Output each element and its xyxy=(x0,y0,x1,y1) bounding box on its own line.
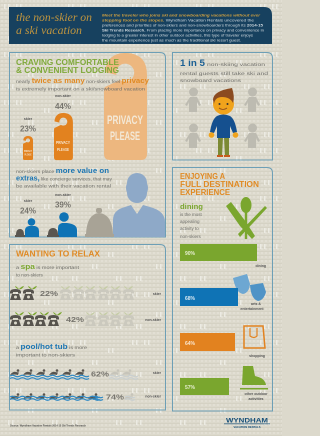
heading: & CONVENIENT LODGING xyxy=(16,66,119,75)
intro text: the mountain experience just as much as the traditional ski resort guest. xyxy=(102,37,241,42)
bar: outdoor 57%: other outdoor xyxy=(245,392,268,396)
extras text: be available with their vacation rental xyxy=(16,184,111,188)
bar: shopping 64%: shopping xyxy=(249,354,265,358)
bar: outdoor 57% xyxy=(180,378,268,401)
dining text: non-skiers xyxy=(180,234,202,239)
chart: pool non-skier 74%: non-skier xyxy=(145,394,162,398)
intro text xyxy=(102,12,264,42)
bar: outdoor 57%: activities xyxy=(249,397,264,401)
chart: extras non-skier 39%: non-skier xyxy=(55,193,72,197)
large bell icon xyxy=(85,208,114,237)
panel: destination experience xyxy=(172,168,272,411)
stat text: rental guests still take ski and xyxy=(180,71,268,77)
logo: Wyndham: WYNDHAM xyxy=(226,418,268,424)
intro text: preferences and priorities of non-skiers and non-snowboarders through its 2014-15 xyxy=(102,22,264,27)
bar: arts 68%: 68% xyxy=(185,296,196,302)
bar: dining 90% xyxy=(180,244,266,268)
chart: pool non-skier 74% xyxy=(10,392,162,402)
heading: ENJOYING A xyxy=(180,172,225,181)
stat text: 1 in 5 xyxy=(180,58,206,69)
chart: privacy non-skier 44%: non-skier xyxy=(55,94,72,98)
title: a ski vacation xyxy=(16,25,82,37)
heading xyxy=(180,172,259,197)
dining text: dining xyxy=(180,204,203,211)
heading: FULL DESTINATION xyxy=(180,180,259,189)
intro text: stepping foot on the slopes. Wyndham Vacation Rentals uncovered the xyxy=(102,17,255,22)
chart: extras non-skier 39% xyxy=(47,193,77,237)
chart: privacy non-skier 44%: PLEASE xyxy=(57,147,69,152)
intro text: Meet the traveler who joins ski and snowboarding vacations without ever xyxy=(102,12,260,17)
chart: extras skier 24% xyxy=(15,199,39,237)
chart: spa skier 22%: skier xyxy=(153,292,162,296)
chart: spa skier 22%: 22% xyxy=(40,289,58,298)
chart: privacy non-skier 44% xyxy=(54,94,73,160)
chart: extras skier 24%: skier xyxy=(24,199,33,203)
spa text: a spa is more important xyxy=(16,264,80,271)
chart: privacy skier 23%: 23% xyxy=(20,124,36,134)
spa text xyxy=(16,264,80,278)
heading: WANTING TO RELAX xyxy=(16,250,101,258)
chart: pool skier 62%: 62% xyxy=(91,370,109,378)
logo: Wyndham xyxy=(224,418,270,429)
intro text: Ski Trends Research. From placing more importance on privacy and convenience in xyxy=(102,27,264,32)
bar: shopping 64% xyxy=(180,333,265,358)
panel: wanting to relax xyxy=(10,244,166,410)
large door hanger: PLEASE xyxy=(110,129,140,143)
chart: privacy non-skier 44%: 44% xyxy=(55,102,71,111)
large door hanger: PRIVACY xyxy=(107,113,143,127)
chart: pool skier 62%: skier xyxy=(153,371,162,375)
chart: spa non-skier 42% xyxy=(10,312,162,326)
stat text: snowboard vacations xyxy=(180,78,242,84)
bar: dining 90%: 90% xyxy=(185,251,196,257)
pool text xyxy=(16,344,87,358)
panel: 1 in 5 xyxy=(172,52,272,160)
chart: privacy skier 23%: PRIVACY xyxy=(24,150,32,153)
grey people xyxy=(185,88,260,148)
chart: privacy non-skier 44%: PRIVACY xyxy=(56,140,70,145)
title: the non-skier on xyxy=(16,12,92,24)
chart: privacy skier 23% xyxy=(20,117,36,160)
chart: pool non-skier 74%: 74% xyxy=(106,392,124,402)
bar: arts 68%: arts & xyxy=(251,302,261,306)
large concierge icon xyxy=(113,173,165,237)
source note: Source: Wyndham Vacation Rentals 2014-15 Ski Trends Research xyxy=(10,424,86,428)
dining text: is the most xyxy=(180,212,203,217)
heading xyxy=(16,58,120,75)
stat text: non-skiing vacation xyxy=(207,62,265,68)
panel: lodging xyxy=(10,52,166,237)
heading: EXPERIENCE xyxy=(180,188,231,197)
bar: dining 90%: dining xyxy=(256,264,266,268)
bar: shopping 64%: 64% xyxy=(185,341,196,347)
stat text xyxy=(180,58,268,84)
dining text: activity to xyxy=(180,226,199,231)
icon: ice skate xyxy=(240,366,268,390)
chart: pool skier 62% xyxy=(10,369,162,379)
privacy text: nearly twice as many non-skiers feel privacy xyxy=(16,78,149,85)
icon: cutlery xyxy=(226,197,267,239)
header banner xyxy=(9,7,272,44)
large door hanger xyxy=(104,53,147,160)
chart: spa skier 22% xyxy=(10,286,162,300)
extras text: non-skiers place more value on xyxy=(16,168,109,175)
chart: privacy skier 23%: PLEASE xyxy=(24,154,32,156)
extras text: extras, like concierge services, that may xyxy=(16,176,113,182)
logo: Wyndham: VACATION RENTALS xyxy=(234,425,260,429)
pool text: important to non-skiers xyxy=(16,352,76,358)
chart: spa non-skier 42%: non-skier xyxy=(145,318,162,322)
privacy text: is extremely important on a ski/snowboard vacation xyxy=(16,86,145,92)
pool text: a pool/hot tub is more xyxy=(16,344,87,351)
skier character xyxy=(209,88,238,157)
chart: extras skier 24%: 24% xyxy=(20,206,36,216)
heading: CRAVING COMFORTABLE xyxy=(16,58,120,67)
dining text: appealing xyxy=(180,219,200,224)
spa text: to non-skiers xyxy=(16,272,43,278)
title xyxy=(16,12,92,37)
dining text xyxy=(180,204,203,239)
intro text: lodging to a greater interest in other outdoor activities, this type of traveler enjoys xyxy=(102,32,253,37)
chart: spa non-skier 42%: 42% xyxy=(66,315,84,324)
bar: arts 68%: entertainment xyxy=(240,307,264,311)
icon: theatre masks xyxy=(233,274,266,301)
bar: arts 68% xyxy=(180,288,264,311)
bar: outdoor 57%: 57% xyxy=(185,385,196,391)
privacy text xyxy=(16,78,149,92)
chart: privacy skier 23%: skier xyxy=(24,117,33,121)
icon: shopping bag xyxy=(244,326,265,348)
chart: extras non-skier 39%: 39% xyxy=(55,200,71,210)
extras text xyxy=(16,168,113,188)
